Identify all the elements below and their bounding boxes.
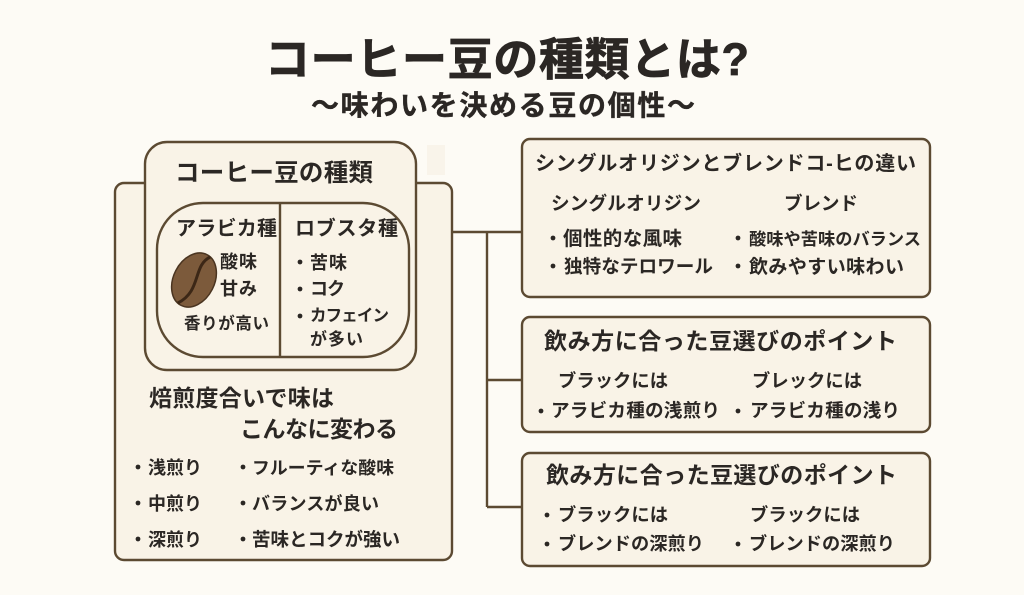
roast level list: 苦味とコクが強い: [252, 529, 400, 550]
left column: ブレンドの深煎り: [558, 533, 704, 554]
roast level list: 中煎り: [148, 494, 202, 514]
heading: 飲み方に合った豆選びのポイント: [544, 328, 897, 354]
blend column: 酸味や苦味のバランス: [749, 229, 921, 249]
arabica column: 甘み: [220, 279, 257, 299]
arabica column: 香りが高い: [184, 313, 269, 333]
arabica column: [163, 217, 277, 333]
roast level list: 浅煎り: [148, 458, 202, 478]
right column: ブレックには: [752, 370, 862, 391]
arabica column: アラビカ種: [176, 217, 277, 240]
subtitle: 〜味わいを決める豆の個性〜: [311, 90, 695, 121]
blend column: 飲みやすい味わい: [749, 256, 904, 278]
robusta column: [295, 216, 398, 349]
arabica column: 酸味: [220, 252, 257, 272]
right column: アラビカ種の浅り: [750, 400, 900, 421]
heading: coffee bean types: コーヒー豆の種類: [175, 159, 374, 187]
icon: coffee bean: [163, 245, 225, 315]
heading: roast levels: [149, 385, 398, 442]
left column: ブラックには: [558, 504, 668, 525]
left column: [545, 504, 704, 554]
roast level list: フルーティな酸味: [252, 458, 394, 478]
blend column: ブレンド: [784, 193, 858, 214]
robusta column: コク: [310, 279, 345, 299]
comparison capsule: [157, 203, 409, 357]
panel: bean choice tips 1: [522, 317, 930, 432]
single origin column: 個性的な風味: [563, 228, 682, 250]
panel: coffee bean types tab: [145, 142, 416, 370]
robusta column: が多い: [310, 329, 363, 349]
left column: [539, 370, 720, 421]
single origin column: シングルオリジン: [551, 193, 701, 214]
robusta column: 苦味: [310, 253, 347, 273]
connector lines: [452, 232, 522, 507]
heading: 飲み方に合った豆選びのポイント: [546, 462, 897, 488]
panel: single origin vs blend: [522, 139, 930, 297]
right column: [736, 370, 900, 421]
heading: roast levels: 焙煎度合いで味は: [149, 385, 334, 411]
heading: roast levels: こんなに変わる: [240, 416, 398, 442]
robusta column: ロブスタ種: [295, 216, 398, 240]
roast level list: バランスが良い: [252, 493, 379, 514]
right column: ブレンドの深煎り: [749, 533, 895, 554]
right column: [736, 504, 895, 554]
roast level list: [136, 458, 400, 550]
left column: ブラックには: [558, 370, 668, 391]
robusta column: カフェイン: [310, 306, 389, 325]
left column: アラビカ種の浅煎り: [551, 400, 720, 421]
right column: ブラックには: [750, 504, 860, 525]
roast level list: 深煎り: [148, 530, 202, 550]
heading: シングルオリジンとブレンドコ-ヒの違い: [535, 151, 916, 175]
panel: bean choice tips 2: [522, 453, 930, 566]
blend column: [736, 193, 921, 278]
single origin column: [551, 193, 713, 277]
single origin column: 独特なテロワール: [564, 256, 713, 277]
title: コーヒー豆の種類とは?: [265, 34, 749, 85]
panel: coffee bean types and roasting: [115, 142, 452, 560]
